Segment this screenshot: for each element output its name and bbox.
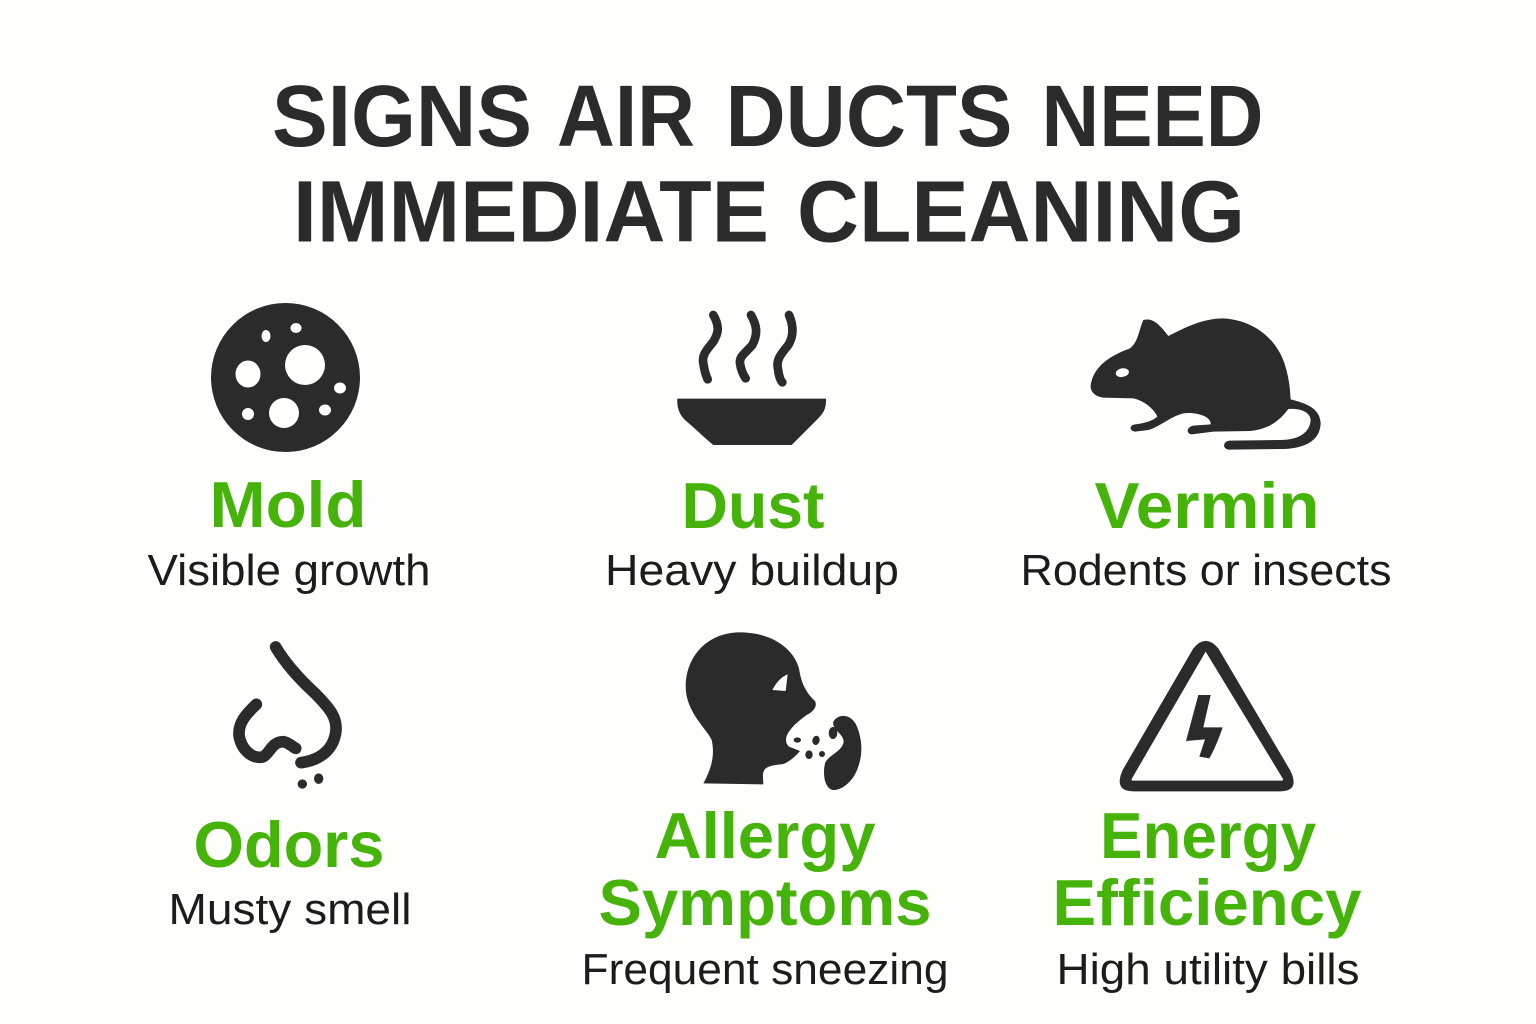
title: NEED [1042, 68, 1264, 165]
heading: mold: Mold [210, 468, 366, 541]
icon: nose [239, 647, 336, 789]
panel: dust [605, 315, 899, 595]
heading: energy efficiency: Efficiency [1052, 866, 1362, 939]
title: AIR [557, 68, 695, 165]
icon: dust [677, 315, 826, 445]
text: energy efficiency: High utility bills [1056, 945, 1360, 994]
heading: vermin: Vermin [1094, 469, 1320, 542]
panel: allergy symptoms [582, 632, 948, 994]
heading: energy efficiency [1052, 799, 1362, 939]
panel: vermin [1020, 318, 1392, 595]
title [272, 68, 1264, 260]
heading: allergy symptoms: Symptoms [598, 866, 932, 939]
heading: dust: Dust [682, 469, 824, 542]
text: vermin: Rodents or insects [1020, 546, 1392, 595]
title: DUCTS [726, 68, 1012, 165]
text: dust: Heavy buildup [605, 546, 899, 595]
icon: sneezing head [686, 632, 861, 790]
title: CLEANING [797, 164, 1245, 260]
title: IMMEDIATE [293, 164, 769, 260]
heading: allergy symptoms: Allergy [654, 799, 876, 872]
icon: mold [211, 303, 360, 452]
heading: odors: Odors [194, 808, 384, 881]
heading: allergy symptoms [598, 799, 932, 939]
icon: vermin [1091, 318, 1321, 450]
panel: odors [168, 647, 412, 934]
text: odors: Musty smell [168, 885, 412, 934]
heading: energy efficiency: Energy [1100, 799, 1316, 872]
title: SIGNS [272, 68, 532, 165]
text: mold: Visible growth [148, 546, 430, 595]
icon: warning triangle [1120, 641, 1294, 791]
text: allergy symptoms: Frequent sneezing [582, 945, 948, 994]
panel: mold [148, 303, 430, 595]
panel: energy efficiency [1052, 641, 1362, 994]
